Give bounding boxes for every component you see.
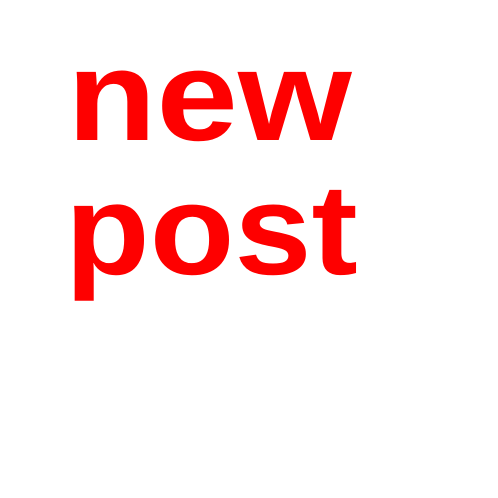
word: new: new [67, 24, 352, 168]
word: post: post [65, 158, 358, 302]
